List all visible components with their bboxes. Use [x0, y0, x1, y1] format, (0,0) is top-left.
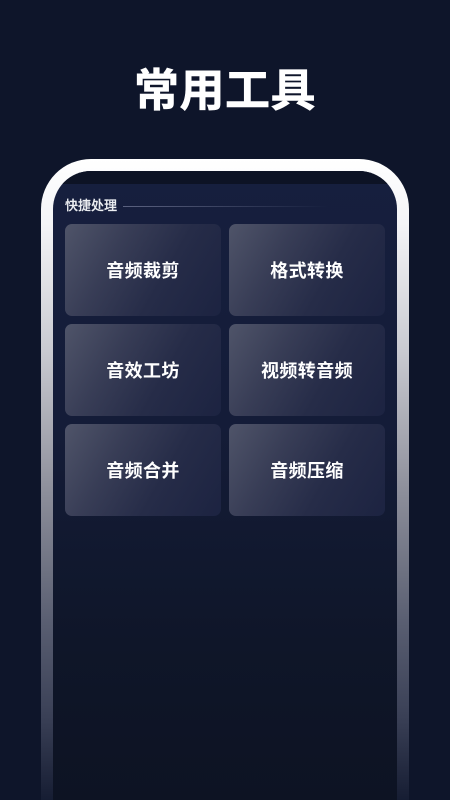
title: 常用工具	[134, 65, 316, 116]
card: sound effects: 音效工坊	[106, 361, 180, 381]
card: video to audio	[229, 324, 385, 416]
card: audio compress	[229, 424, 385, 516]
section label: 快捷处理	[65, 198, 117, 213]
card: video to audio: 视频转音频	[261, 361, 353, 381]
card: audio compress: 音频压缩	[270, 461, 344, 481]
section divider line	[123, 206, 328, 207]
card: audio trim: 音频裁剪	[106, 261, 180, 281]
card: sound effects	[65, 324, 221, 416]
status bar	[53, 171, 397, 184]
card: format conversion	[229, 224, 385, 316]
card: audio trim	[65, 224, 221, 316]
card: audio merge: 音频合并	[106, 461, 180, 481]
phone screen	[53, 171, 397, 800]
card: format conversion: 格式转换	[270, 261, 344, 281]
card: audio merge	[65, 424, 221, 516]
phone frame	[41, 159, 409, 800]
